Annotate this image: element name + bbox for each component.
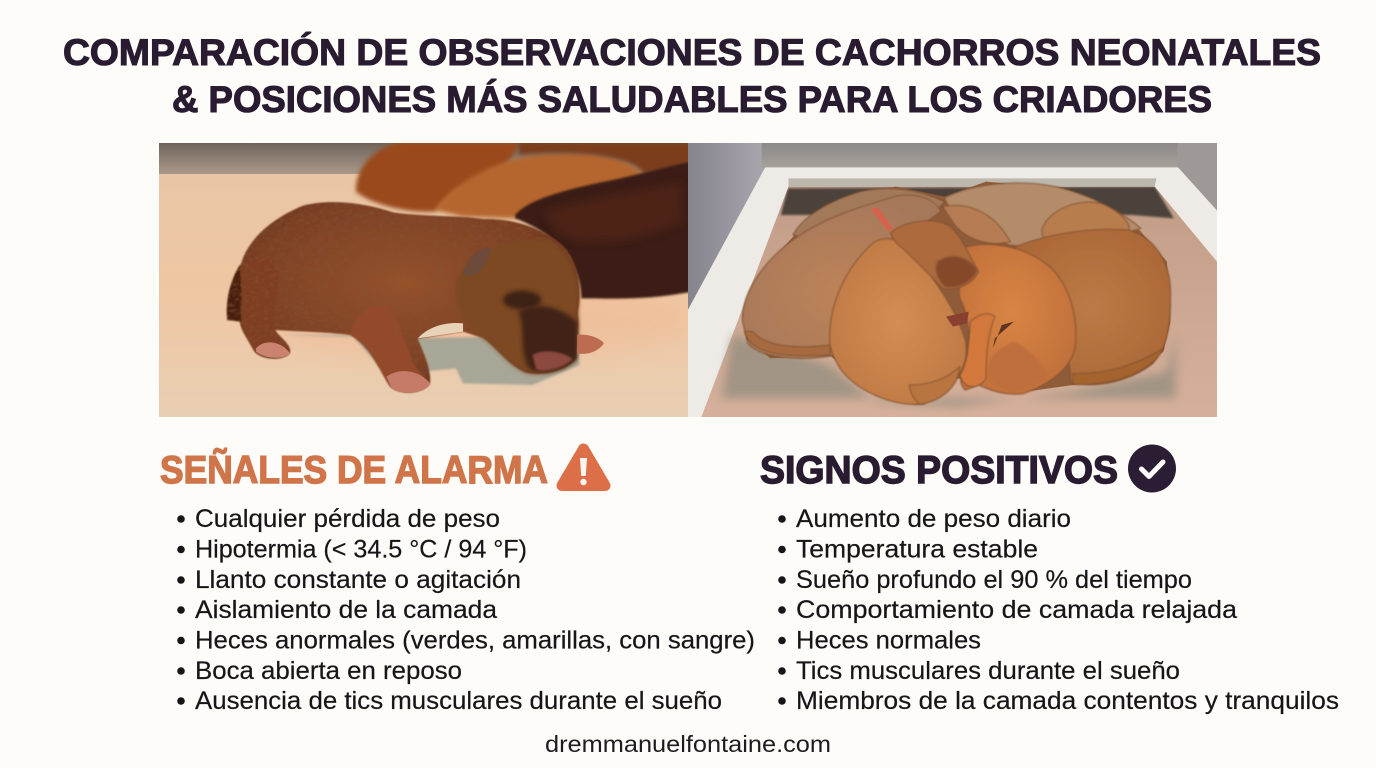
list: positive signs: Aumento de peso diario: [796, 505, 1071, 533]
right puppy: [1012, 229, 1171, 385]
front puppy head: [890, 221, 978, 289]
list: alarm signs: Aislamiento de la camada: [195, 596, 497, 624]
puppy ear: [463, 248, 491, 277]
front puppy muzzle: [936, 256, 977, 288]
title: & POSICIONES MÁS SALUDABLES PARA LOS CRIADORES: [172, 79, 1212, 120]
icon: warning triangle: [562, 449, 605, 486]
left puppy: [743, 195, 941, 358]
front puppy tail: [910, 367, 960, 404]
puppy tail and hind leg shading: [227, 265, 243, 322]
puppy head: [455, 240, 578, 374]
title: [63, 31, 1321, 120]
icon: check mark circle: [1128, 444, 1176, 492]
sleeping puppy head, upper right: [1040, 201, 1130, 238]
red collar: [871, 208, 893, 232]
cast shadow on floor: [279, 335, 580, 385]
list: positive signs: Miembros de la camada contentos y tranquilos: [796, 687, 1339, 715]
photo: litter sleeping together: [687, 142, 1223, 420]
second blurred puppy: [435, 153, 644, 218]
list: alarm signs: [177, 505, 755, 715]
footer website: dremmanuelfontaine.com: [545, 731, 831, 757]
floor warm glow: [297, 302, 676, 348]
list: positive signs: Comportamiento de camada relajada: [796, 596, 1237, 624]
right puppy tail: [1073, 348, 1163, 385]
photo: isolated newborn puppy: [157, 142, 696, 420]
top right puppy: [944, 183, 1141, 252]
litter shadow: [722, 335, 1176, 407]
dark puppy in background: [515, 162, 693, 299]
list: alarm signs: Hipotermia (< 34.5 °C / 94 °F): [195, 536, 527, 564]
center puppy: [959, 244, 1076, 394]
list: positive signs: Sueño profundo el 90 % del tiempo: [796, 566, 1192, 594]
puppy front leg: [350, 306, 430, 393]
list: positive signs: Tics musculares durante el sueño: [796, 657, 1180, 685]
belly white patch: [418, 323, 463, 338]
list: alarm signs: Heces anormales (verdes, amarillas, con sangre): [195, 626, 755, 654]
litter underlay: [743, 182, 1170, 405]
title: COMPARACIÓN DE OBSERVACIONES DE CACHORROS NEONATALES: [63, 31, 1321, 73]
dark paw gap: [946, 312, 969, 327]
back left puppy: [793, 189, 944, 242]
paws: [387, 371, 430, 392]
left puppy tail: [744, 332, 830, 356]
list: positive signs: Heces normales: [796, 626, 981, 654]
back wall: [762, 142, 1179, 168]
left wall: [687, 142, 765, 312]
list: alarm signs: Ausencia de tics musculares durante el sueño: [195, 687, 722, 715]
right wall: [1178, 143, 1217, 210]
dark gap behind litter: [781, 187, 1174, 218]
list: alarm signs: Llanto constante o agitación: [195, 566, 521, 594]
center puppy foreleg: [960, 314, 995, 387]
main puppy: [227, 202, 580, 393]
sleeping puppy head, top: [943, 205, 1010, 244]
closed eye shading: [503, 291, 541, 309]
list: positive signs: Temperatura estable: [796, 536, 1038, 564]
heading: alarm signs: SEÑALES DE ALARMA: [160, 448, 548, 492]
list: alarm signs: Cualquier pérdida de peso: [195, 505, 500, 533]
list: alarm signs: Boca abierta en reposo: [195, 657, 462, 685]
center puppy face: [990, 342, 1039, 375]
list: positive signs: [778, 505, 1339, 715]
heading: positive signs: SIGNOS POSITIVOS: [760, 449, 1118, 492]
white box frame: [687, 167, 1223, 418]
front puppy: [830, 239, 966, 405]
blurred puppy in background: [356, 142, 519, 212]
muzzle shading: [519, 306, 577, 372]
